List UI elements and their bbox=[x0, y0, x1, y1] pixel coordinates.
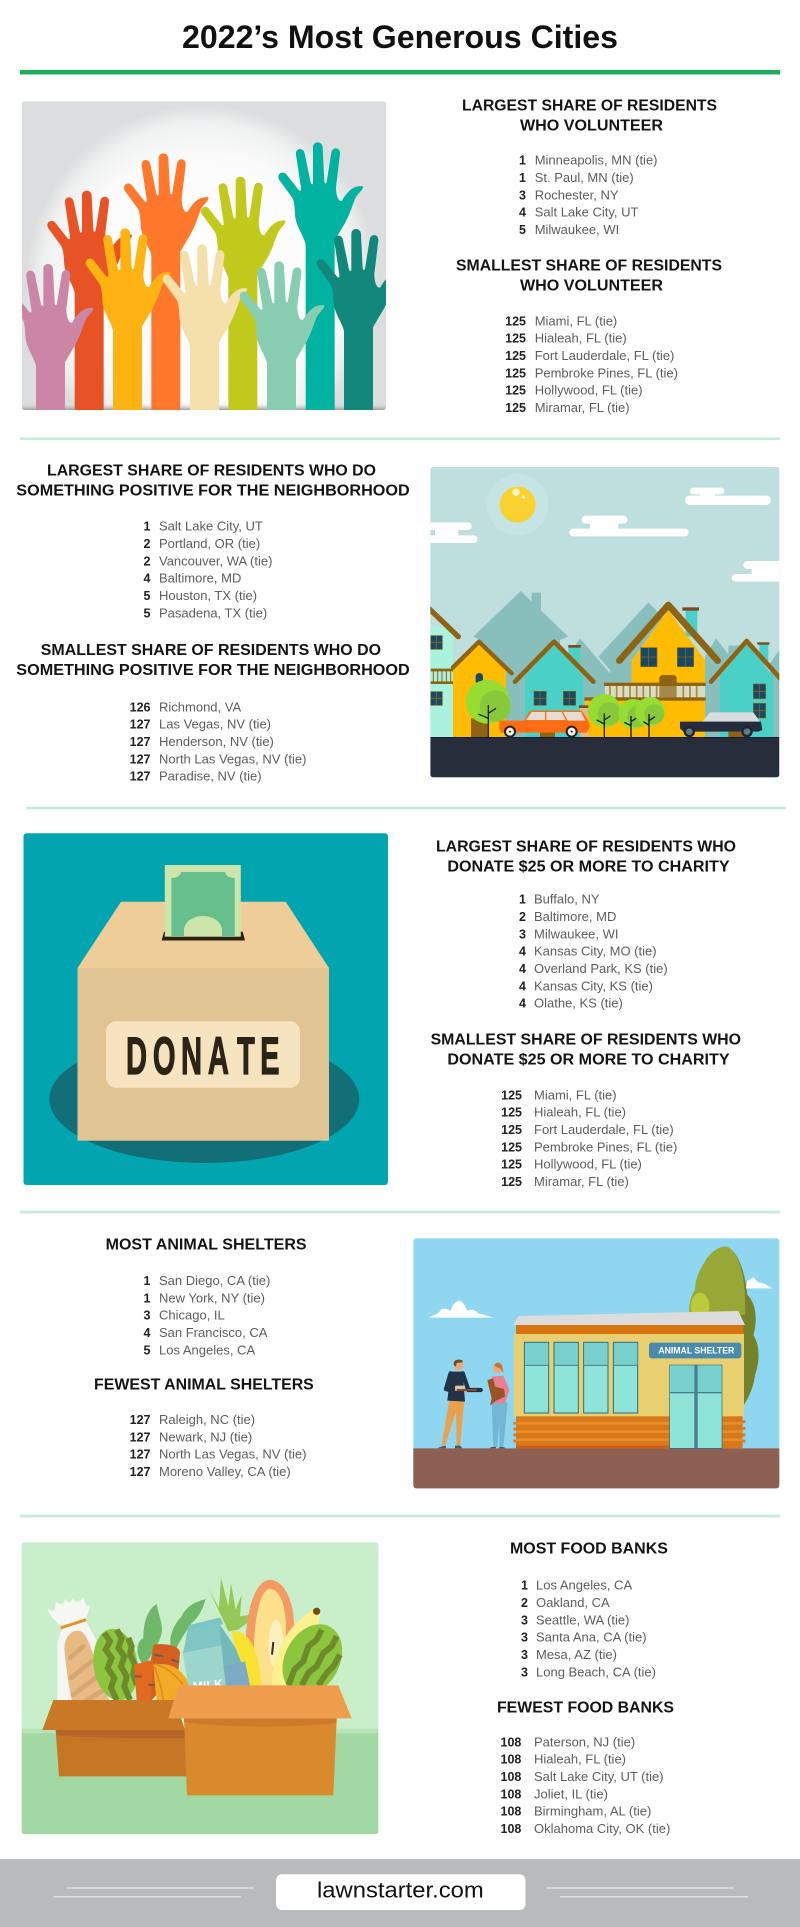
list: smallest share neighborhood: 127 bbox=[130, 770, 151, 784]
panel: neighborhood bbox=[16, 462, 783, 784]
list: fewest animal shelters: Newark, NJ (tie) bbox=[159, 1429, 252, 1444]
illustration: raised hands bbox=[22, 101, 386, 410]
list: smallest share neighborhood: Henderson, NV (tie) bbox=[159, 734, 274, 749]
list: largest share neighborhood: 4 bbox=[144, 572, 151, 586]
list: most food banks: 3 bbox=[521, 1665, 528, 1679]
list: smallest share neighborhood bbox=[130, 699, 306, 784]
list: largest share neighborhood: Vancouver, WA (tie) bbox=[159, 553, 272, 568]
label: milk: MILK bbox=[192, 1677, 224, 1694]
list: most animal shelters: San Diego, CA (tie) bbox=[159, 1273, 270, 1288]
heading: smallest share volunteer bbox=[456, 258, 722, 295]
list: fewest food banks: Oklahoma City, OK (tie) bbox=[534, 1821, 670, 1836]
list: smallest share neighborhood: 127 bbox=[130, 752, 151, 766]
figure: two people with a dog bbox=[437, 1360, 509, 1448]
heading: smallest share donate: SMALLEST SHARE OF RESIDENTS WHO bbox=[431, 1032, 741, 1049]
heading: smallest share neighborhood bbox=[16, 642, 410, 679]
list: largest share neighborhood: Baltimore, MD bbox=[159, 571, 241, 586]
list: smallest share neighborhood: 127 bbox=[130, 718, 151, 732]
list: largest share donate: 3 bbox=[519, 927, 526, 941]
green title rule bbox=[20, 70, 780, 74]
list: most food banks: 1 bbox=[521, 1579, 528, 1593]
list: largest share volunteer: 3 bbox=[519, 188, 526, 202]
list: most food banks: Seattle, WA (tie) bbox=[536, 1612, 629, 1627]
list: largest share donate: Overland Park, KS (tie) bbox=[534, 961, 668, 976]
list: most food banks: 3 bbox=[521, 1631, 528, 1645]
list: fewest food banks: Salt Lake City, UT (tie) bbox=[534, 1769, 664, 1784]
list: smallest share donate bbox=[501, 1087, 677, 1189]
list: largest share neighborhood: 2 bbox=[144, 554, 151, 568]
list: smallest share volunteer: Hollywood, FL (tie) bbox=[535, 383, 643, 398]
list: smallest share donate: Miami, FL (tie) bbox=[534, 1087, 617, 1102]
heading: most animal shelters: MOST ANIMAL SHELTERS bbox=[106, 1236, 307, 1253]
illustration: animal shelter building bbox=[413, 1238, 779, 1488]
list: smallest share neighborhood: Paradise, NV (tie) bbox=[159, 769, 262, 784]
list: fewest food banks: 108 bbox=[501, 1822, 521, 1836]
list: most food banks bbox=[521, 1578, 656, 1679]
sign: animal shelter bbox=[649, 1343, 741, 1358]
list: most animal shelters: Chicago, IL bbox=[159, 1308, 225, 1323]
list: most animal shelters: New York, NY (tie) bbox=[159, 1290, 265, 1305]
list: fewest food banks bbox=[501, 1734, 670, 1836]
list: fewest animal shelters: Moreno Valley, CA (tie) bbox=[159, 1464, 291, 1479]
heading: largest share volunteer: LARGEST SHARE OF RESIDENTS bbox=[462, 98, 717, 115]
illustration: neighborhood street bbox=[427, 467, 783, 777]
list: fewest animal shelters: North Las Vegas, NV (tie) bbox=[159, 1447, 306, 1462]
heading: largest share neighborhood: SOMETHING POSITIVE FOR THE NEIGHBORHOOD bbox=[16, 482, 410, 499]
list: largest share neighborhood: Houston, TX (tie) bbox=[159, 588, 257, 603]
list: smallest share volunteer: Fort Lauderdale, FL (tie) bbox=[535, 348, 674, 363]
list: smallest share volunteer: Miramar, FL (tie) bbox=[535, 400, 630, 415]
list: largest share donate: Baltimore, MD bbox=[534, 909, 616, 924]
heading: smallest share donate bbox=[431, 1032, 741, 1069]
list: largest share neighborhood: Salt Lake City, UT bbox=[159, 519, 263, 534]
list: most food banks: Los Angeles, CA bbox=[536, 1578, 632, 1593]
heading: largest share volunteer bbox=[462, 98, 717, 135]
list: smallest share neighborhood: Las Vegas, NV (tie) bbox=[159, 717, 271, 732]
list: largest share donate: Milwaukee, WI bbox=[534, 926, 619, 941]
heading: smallest share volunteer: SMALLEST SHARE OF RESIDENTS bbox=[456, 258, 722, 275]
list: smallest share volunteer: 125 bbox=[505, 314, 526, 328]
list: fewest animal shelters bbox=[130, 1412, 306, 1479]
list: largest share donate: Olathe, KS (tie) bbox=[534, 996, 623, 1011]
list: smallest share volunteer: 125 bbox=[505, 366, 526, 380]
list: fewest food banks: Joliet, IL (tie) bbox=[534, 1786, 608, 1801]
list: largest share volunteer: Minneapolis, MN (tie) bbox=[535, 153, 658, 168]
list: fewest food banks: 108 bbox=[501, 1805, 521, 1819]
heading: largest share volunteer: WHO VOLUNTEER bbox=[520, 118, 663, 135]
list: fewest food banks: 108 bbox=[501, 1735, 521, 1749]
list: fewest food banks: Hialeah, FL (tie) bbox=[534, 1752, 626, 1767]
list: largest share neighborhood bbox=[144, 519, 272, 620]
sign: animal shelter: ANIMAL SHELTER bbox=[658, 1346, 735, 1356]
list: most food banks: 2 bbox=[521, 1596, 528, 1610]
list: smallest share neighborhood: North Las Vegas, NV (tie) bbox=[159, 751, 306, 766]
list: most animal shelters: 3 bbox=[144, 1309, 151, 1323]
list: most animal shelters: San Francisco, CA bbox=[159, 1325, 268, 1340]
list: smallest share donate: Fort Lauderdale, FL (tie) bbox=[534, 1122, 674, 1137]
panel: animal shelters bbox=[94, 1236, 779, 1488]
list: smallest share neighborhood: 127 bbox=[130, 735, 151, 749]
list: largest share volunteer: St. Paul, MN (tie) bbox=[535, 170, 634, 185]
panel: donations bbox=[24, 833, 741, 1189]
list: largest share volunteer: Milwaukee, WI bbox=[535, 222, 619, 237]
list: largest share volunteer: Rochester, NY bbox=[535, 187, 619, 202]
list: smallest share donate: 125 bbox=[501, 1123, 522, 1137]
list: largest share neighborhood: Portland, OR (tie) bbox=[159, 536, 260, 551]
list: smallest share donate: 125 bbox=[501, 1088, 522, 1102]
list: smallest share neighborhood: Richmond, VA bbox=[159, 699, 241, 714]
footer website: lawnstarter.com bbox=[317, 1878, 484, 1903]
list: largest share volunteer bbox=[519, 153, 658, 237]
list: smallest share donate: 125 bbox=[501, 1158, 522, 1172]
list: smallest share donate: Pembroke Pines, FL (tie) bbox=[534, 1139, 677, 1154]
list: most food banks: 3 bbox=[521, 1613, 528, 1627]
list: largest share donate: 4 bbox=[519, 945, 526, 959]
list: smallest share volunteer: 125 bbox=[505, 332, 526, 346]
list: smallest share donate: 125 bbox=[501, 1106, 522, 1120]
illustration: donation box: DONATE bbox=[126, 1027, 280, 1086]
list: most animal shelters: 1 bbox=[144, 1274, 151, 1288]
list: fewest food banks: 108 bbox=[501, 1753, 521, 1767]
heading: fewest animal shelters: FEWEST ANIMAL SHELTERS bbox=[94, 1376, 314, 1393]
list: most food banks: Santa Ana, CA (tie) bbox=[536, 1630, 647, 1645]
list: most animal shelters: Los Angeles, CA bbox=[159, 1342, 255, 1357]
list: most animal shelters bbox=[144, 1273, 270, 1357]
panel: volunteering bbox=[22, 100, 722, 414]
list: largest share neighborhood: 2 bbox=[144, 537, 151, 551]
list: fewest food banks: Paterson, NJ (tie) bbox=[534, 1734, 635, 1749]
list: largest share donate: Kansas City, KS (tie) bbox=[534, 978, 653, 993]
list: largest share donate bbox=[519, 892, 668, 1011]
list: smallest share volunteer: 125 bbox=[505, 349, 526, 363]
list: smallest share donate: 125 bbox=[501, 1175, 522, 1189]
list: most food banks: Long Beach, CA (tie) bbox=[536, 1664, 656, 1679]
list: most animal shelters: 1 bbox=[144, 1291, 151, 1305]
list: fewest animal shelters: 127 bbox=[130, 1465, 151, 1479]
list: most food banks: Mesa, AZ (tie) bbox=[536, 1647, 617, 1662]
list: largest share neighborhood: 1 bbox=[144, 520, 151, 534]
list: largest share donate: Kansas City, MO (tie) bbox=[534, 944, 657, 959]
list: fewest food banks: Birmingham, AL (tie) bbox=[534, 1804, 651, 1819]
heading: smallest share neighborhood: SMALLEST SHARE OF RESIDENTS WHO DO bbox=[41, 642, 381, 659]
list: largest share neighborhood: Pasadena, TX (tie) bbox=[159, 605, 267, 620]
list: largest share donate: 1 bbox=[519, 893, 526, 907]
list: smallest share neighborhood: 126 bbox=[130, 700, 151, 714]
list: fewest food banks: 108 bbox=[501, 1787, 521, 1801]
list: fewest food banks: 108 bbox=[501, 1770, 521, 1784]
list: smallest share volunteer: 125 bbox=[505, 384, 526, 398]
list: largest share donate: Buffalo, NY bbox=[534, 892, 600, 907]
list: smallest share volunteer: Pembroke Pines, FL (tie) bbox=[535, 365, 678, 380]
list: most animal shelters: 5 bbox=[144, 1343, 151, 1357]
heading: smallest share volunteer: WHO VOLUNTEER bbox=[520, 278, 663, 295]
heading: largest share neighborhood bbox=[16, 462, 410, 499]
list: largest share volunteer: 4 bbox=[519, 206, 526, 220]
list: smallest share donate: Miramar, FL (tie) bbox=[534, 1174, 629, 1189]
illustration: food boxes bbox=[22, 1542, 378, 1834]
list: fewest animal shelters: 127 bbox=[130, 1448, 151, 1462]
heading: smallest share donate: DONATE $25 OR MORE TO CHARITY bbox=[447, 1052, 730, 1069]
list: largest share donate: 4 bbox=[519, 962, 526, 976]
illustration: donation box bbox=[24, 833, 388, 1185]
list: largest share donate: 4 bbox=[519, 979, 526, 993]
list: fewest animal shelters: Raleigh, NC (tie) bbox=[159, 1412, 255, 1427]
list: largest share volunteer: 1 bbox=[519, 154, 526, 168]
heading: most food banks: MOST FOOD BANKS bbox=[510, 1540, 668, 1557]
heading: largest share neighborhood: LARGEST SHARE OF RESIDENTS WHO DO bbox=[47, 462, 376, 479]
list: largest share donate: 4 bbox=[519, 997, 526, 1011]
heading: largest share donate bbox=[436, 838, 736, 875]
heading: fewest food banks: FEWEST FOOD BANKS bbox=[497, 1700, 674, 1717]
list: largest share volunteer: 5 bbox=[519, 223, 526, 237]
list: smallest share donate: 125 bbox=[501, 1140, 522, 1154]
list: most food banks: Oakland, CA bbox=[536, 1595, 610, 1610]
list: fewest animal shelters: 127 bbox=[130, 1413, 151, 1427]
list: smallest share donate: Hialeah, FL (tie) bbox=[534, 1105, 626, 1120]
heading: largest share donate: DONATE $25 OR MORE TO CHARITY bbox=[447, 858, 730, 875]
list: largest share volunteer: 1 bbox=[519, 171, 526, 185]
list: largest share neighborhood: 5 bbox=[144, 606, 151, 620]
list: smallest share volunteer: 125 bbox=[505, 401, 526, 415]
list: most animal shelters: 4 bbox=[144, 1326, 151, 1340]
list: most food banks: 3 bbox=[521, 1648, 528, 1662]
list: largest share donate: 2 bbox=[519, 910, 526, 924]
heading: largest share donate: LARGEST SHARE OF RESIDENTS WHO bbox=[436, 838, 736, 855]
heading: smallest share neighborhood: SOMETHING POSITIVE FOR THE NEIGHBORHOOD bbox=[16, 662, 410, 679]
list: smallest share volunteer bbox=[505, 313, 678, 415]
list: smallest share volunteer: Miami, FL (tie) bbox=[535, 313, 617, 328]
list: smallest share donate: Hollywood, FL (tie) bbox=[534, 1157, 642, 1172]
title: 2022’s Most Generous Cities bbox=[182, 19, 618, 55]
footer band bbox=[0, 1859, 800, 1927]
list: largest share volunteer: Salt Lake City, UT bbox=[535, 205, 639, 220]
panel: food banks bbox=[22, 1540, 674, 1836]
list: fewest animal shelters: 127 bbox=[130, 1430, 151, 1444]
list: largest share neighborhood: 5 bbox=[144, 589, 151, 603]
list: smallest share volunteer: Hialeah, FL (tie) bbox=[535, 331, 627, 346]
